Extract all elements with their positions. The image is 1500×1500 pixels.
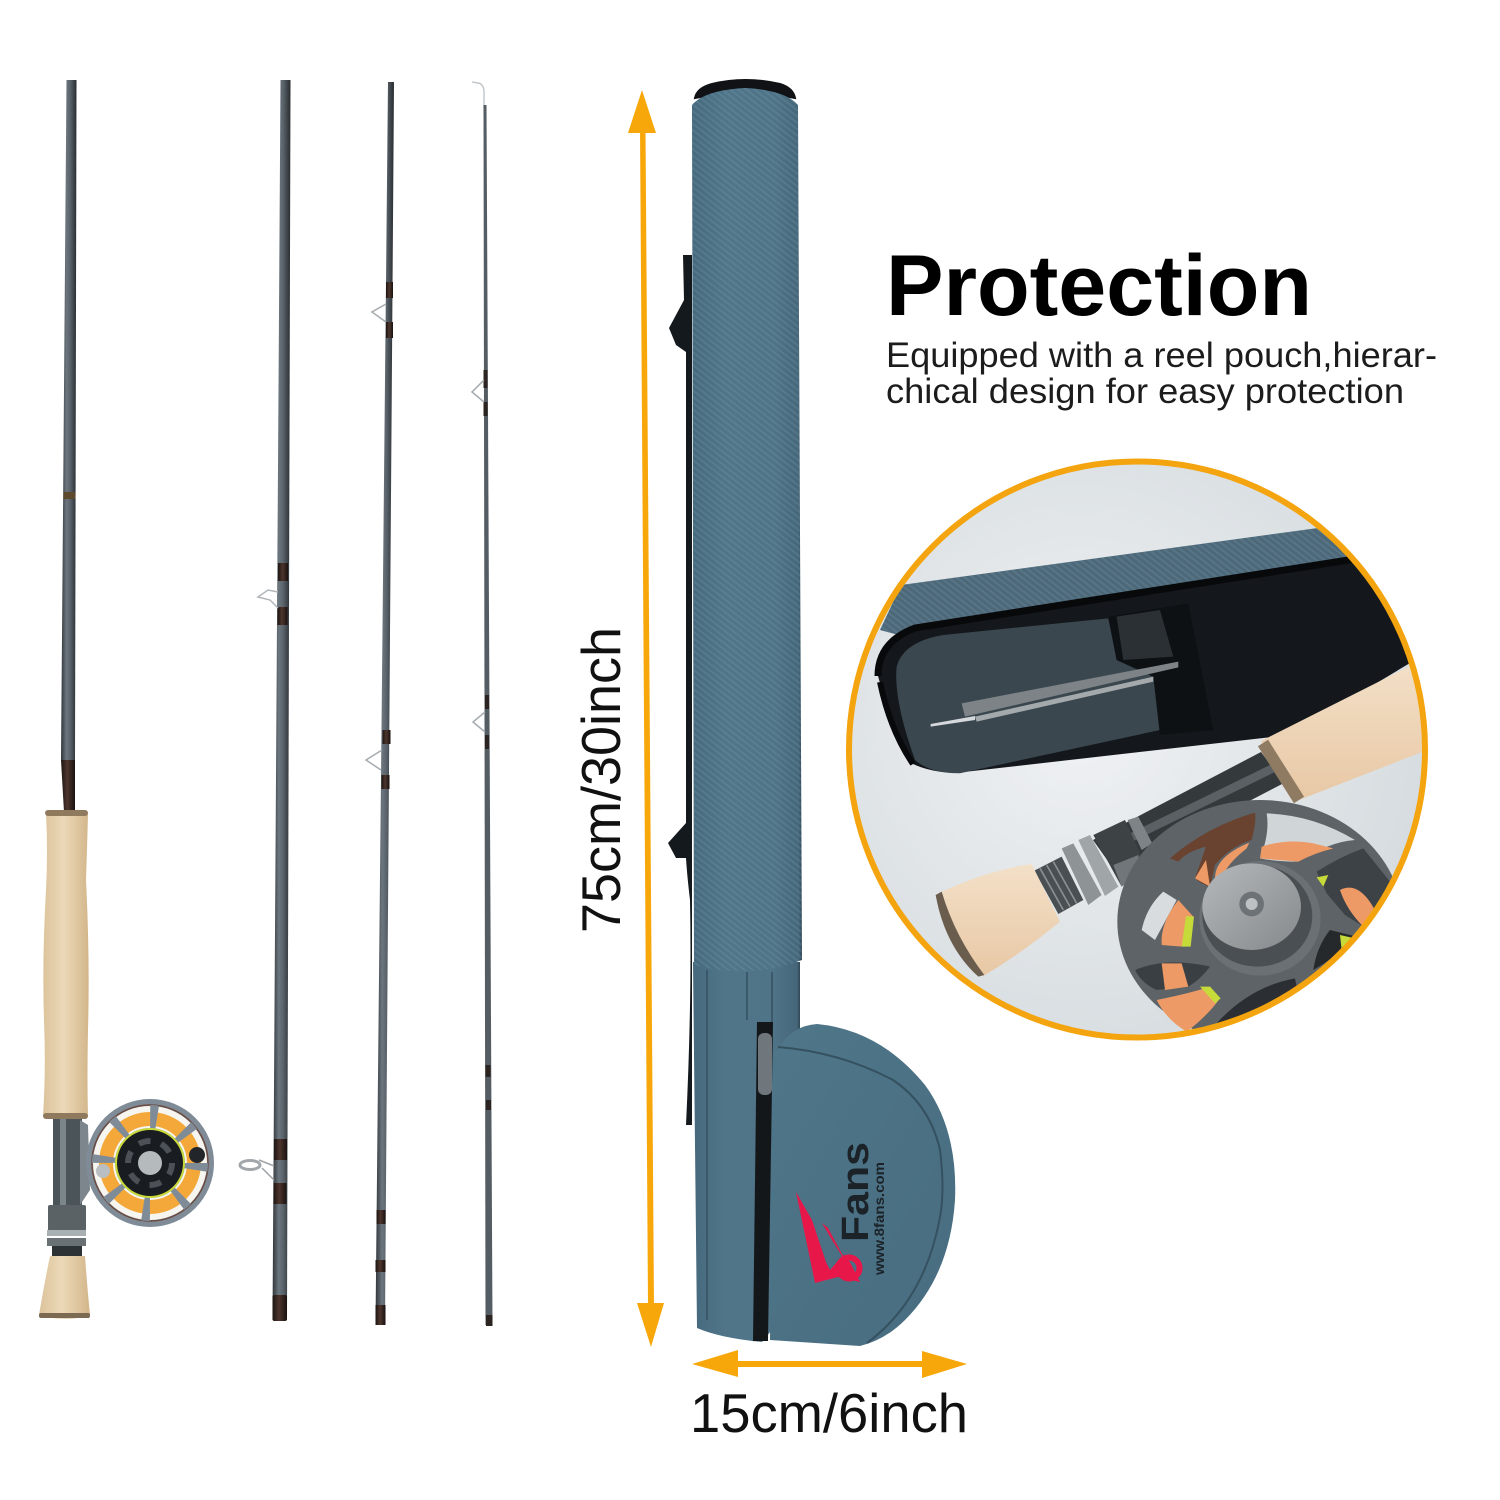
butt assembly: [936, 817, 1152, 977]
horizontal dimension arrow: [692, 1350, 967, 1378]
heading: Protection: [886, 238, 1312, 334]
label: length: 75cm/30inch: [570, 627, 632, 933]
rod section 4 tip: [472, 82, 492, 1326]
case lower body: [693, 962, 800, 1342]
orange ring: [849, 462, 1425, 1038]
description text: Equipped with a reel pouch,hierar-: [886, 336, 1437, 375]
icon: fly reel small: [80, 1099, 214, 1227]
logo mark: [796, 1192, 860, 1283]
case lining: [896, 603, 1213, 773]
cork butt: [936, 864, 1060, 976]
label: width: 15cm/6inch: [690, 1382, 968, 1444]
zipper: [753, 1022, 773, 1341]
rod seat: [1093, 752, 1284, 871]
rod case: [668, 80, 955, 1346]
upper cork grip: [1261, 666, 1422, 800]
reel windows: [1170, 813, 1255, 887]
knurled rings: [1062, 843, 1102, 905]
reel pouch: [770, 1024, 955, 1346]
zipper pull: [758, 1033, 772, 1095]
open case: [878, 528, 1415, 773]
description text: [886, 336, 1437, 411]
case lid: [695, 80, 795, 98]
rod section 2: [240, 80, 290, 1321]
case tube: [692, 88, 802, 971]
circular detail photo: [840, 450, 1440, 1050]
case strap: [668, 255, 692, 1125]
description text: chical design for easy protection: [886, 372, 1404, 411]
reel hub: [1199, 861, 1321, 976]
logo wordmark: Fans: [835, 1142, 877, 1242]
rod section 1 with handle and reel: [39, 80, 214, 1319]
threads: [1034, 857, 1083, 914]
logo url: www.8fans.com: [871, 1162, 887, 1276]
collar: [1093, 820, 1142, 887]
vertical dimension arrow: [628, 90, 664, 1347]
fly reel large: [1117, 800, 1403, 1043]
rod section 3: [366, 82, 394, 1325]
